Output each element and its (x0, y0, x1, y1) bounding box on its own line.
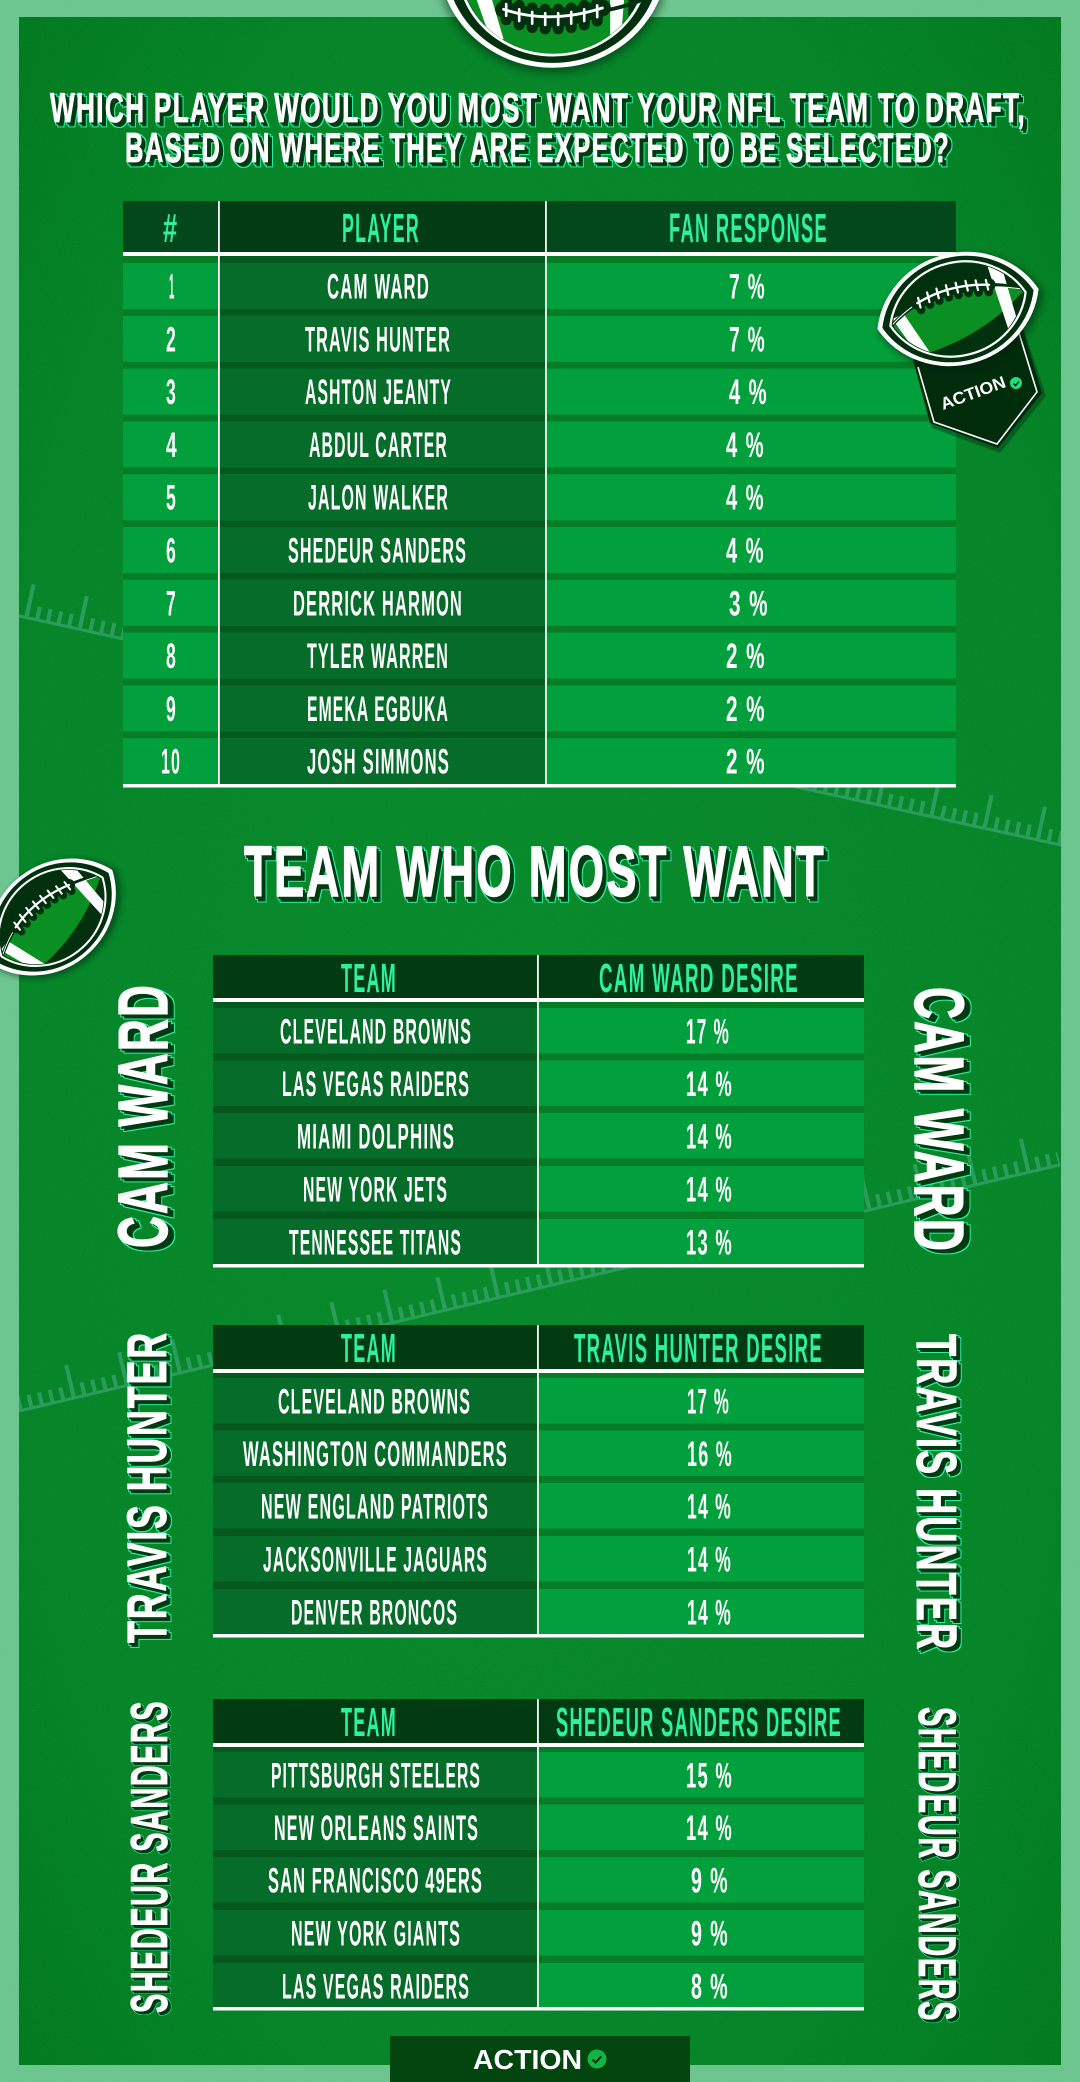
header labels: TEAM (341, 1325, 397, 1371)
row: 10 Josh Simmons: 2 % (726, 743, 766, 782)
football (856, 229, 1060, 390)
row: 7 Derrick Harmon: DERRICK HARMON (293, 584, 463, 623)
row: New York Giants: NEW YORK GIANTS (291, 1914, 461, 1954)
row: New Orleans Saints: 14 % (686, 1809, 733, 1848)
icon: left football (0, 823, 152, 1012)
row: 1 Cam Ward: 7 % (729, 268, 766, 306)
row: Washington Commanders: WASHINGTON COMMANDERS (243, 1435, 508, 1474)
header labels (341, 1699, 842, 1745)
row: 4 Abdul Carter: ABDUL CARTER (309, 426, 448, 465)
row: 4 Abdul Carter (166, 426, 765, 465)
side label left: Shedeur Sanders: SHEDEUR SANDERS (121, 1700, 179, 2013)
table header labels: PLAYER (342, 205, 420, 251)
row: 10 Josh Simmons (161, 743, 766, 782)
title (50, 84, 1026, 171)
row: 8 Tyler Warren: TYLER WARREN (307, 637, 449, 676)
row: 4 Abdul Carter: 4 % (726, 426, 765, 465)
row: 10 Josh Simmons: 10 (161, 743, 181, 782)
row: 3 Ashton Jeanty: ASHTON JEANTY (305, 373, 452, 412)
icon: top football (436, 0, 680, 73)
row: 6 Shedeur Sanders: 6 (166, 532, 177, 570)
table background (213, 1325, 864, 1634)
row: 9 Emeka Egbuka (166, 690, 766, 729)
row: 1 Cam Ward (169, 268, 766, 306)
row: 9 Emeka Egbuka: 2 % (726, 690, 766, 729)
panel: fan response table (123, 201, 956, 788)
row: 9 Emeka Egbuka: 9 (166, 690, 177, 729)
row: Denver Broncos: DENVER BRONCOS (291, 1594, 458, 1632)
panel: fan response table: FAN RESPONSE (669, 205, 828, 251)
icon: football with Action pennant (856, 229, 1060, 453)
panel: Cam Ward desire table: CAM WARD DESIRE (599, 955, 799, 1001)
panel: Cam Ward desire table: 17 % (686, 1012, 730, 1052)
side label left: Cam Ward: CAM WARD (104, 983, 182, 1248)
footer: Action logo (390, 2036, 690, 2082)
row: 5 Jalon Walker: 4 % (726, 479, 765, 518)
row: Jacksonville Jaguars: JACKSONVILLE JAGUARS (263, 1540, 488, 1580)
row: 7 Derrick Harmon: 3 % (729, 584, 769, 623)
row: New Orleans Saints: NEW ORLEANS SAINTS (274, 1809, 479, 1848)
row: New York Giants: 9 % (691, 1914, 729, 1954)
row: 3 Ashton Jeanty (166, 373, 768, 412)
row: New England Patriots: NEW ENGLAND PATRIOTS (261, 1488, 489, 1526)
row: 8 Tyler Warren: 2 % (726, 637, 766, 676)
row: 6 Shedeur Sanders: SHEDEUR SANDERS (288, 532, 467, 570)
row: 7 Derrick Harmon (166, 584, 769, 623)
row: 6 Shedeur Sanders: 4 % (726, 532, 765, 570)
table background (213, 1699, 864, 2007)
table body stripes (123, 256, 956, 784)
row: 8 Tyler Warren: 8 (166, 637, 177, 676)
side label left: Travis Hunter: TRAVIS HUNTER (115, 1331, 178, 1643)
table header labels: # (163, 205, 179, 251)
table header backgrounds (123, 201, 956, 252)
row: 9 Emeka Egbuka: EMEKA EGBUKA (307, 690, 449, 729)
row: Washington Commanders: 16 % (687, 1435, 733, 1474)
row: Pittsburgh Steelers: PITTSBURGH STEELERS (271, 1756, 481, 1796)
row: 2 Travis Hunter (166, 320, 766, 359)
row: Denver Broncos: 14 % (687, 1594, 732, 1632)
table background (213, 955, 864, 1264)
panel: Shedeur Sanders desire table (213, 1699, 864, 2010)
row: San Francisco 49ers: 9 % (691, 1862, 729, 1900)
row: 2 Travis Hunter: 7 % (729, 320, 766, 359)
row: 4 Abdul Carter: 4 (166, 426, 178, 465)
table header labels (163, 205, 828, 251)
yard line: ascending behind team tables (15, 1148, 1060, 1411)
row: Cleveland Browns: CLEVELAND BROWNS (278, 1382, 471, 1422)
footer: Action logo: ACTION (473, 2044, 582, 2075)
side label right: Travis Hunter: TRAVIS HUNTER (904, 1334, 968, 1651)
row: 5 Jalon Walker: JALON WALKER (308, 479, 449, 518)
row: New England Patriots: 14 % (687, 1488, 732, 1526)
row: Cleveland Browns: CLEVELAND BROWNS (280, 1012, 472, 1052)
row: San Francisco 49ers: SAN FRANCISCO 49ERS (268, 1862, 483, 1900)
row: Miami Dolphins: 14 % (686, 1118, 733, 1156)
row: Tennessee Titans: 13 % (686, 1224, 733, 1262)
row: Miami Dolphins: MIAMI DOLPHINS (297, 1118, 455, 1156)
row: Tennessee Titans: TENNESSEE TITANS (289, 1224, 462, 1262)
row: Las Vegas Raiders: LAS VEGAS RAIDERS (282, 1968, 470, 2006)
row: Las Vegas Raiders: 8 % (691, 1968, 729, 2006)
panel: Travis Hunter desire table (213, 1325, 864, 1638)
row: 1 Cam Ward: CAM WARD (327, 268, 430, 306)
row: 10 Josh Simmons: JOSH SIMMONS (307, 743, 450, 782)
yard line: descending behind first table (19, 599, 1066, 845)
row: Las Vegas Raiders: LAS VEGAS RAIDERS (282, 1065, 470, 1104)
header labels: TEAM (341, 1699, 397, 1745)
row: 2 Travis Hunter: 2 (166, 320, 177, 359)
header labels: TEAM (341, 955, 397, 1001)
row: New York Jets: NEW YORK JETS (303, 1170, 448, 1210)
row: 5 Jalon Walker (166, 479, 765, 518)
header labels (341, 955, 799, 1001)
row: 3 Ashton Jeanty: 4 % (729, 373, 768, 412)
row: 8 Tyler Warren (166, 637, 766, 676)
pennant: ACTION (938, 373, 1008, 414)
header labels (341, 1325, 823, 1371)
row: 3 Ashton Jeanty: 3 (166, 373, 177, 412)
row: Jacksonville Jaguars: 14 % (687, 1540, 732, 1580)
panel: Cam Ward desire table (213, 955, 864, 1268)
row: 1 Cam Ward: 1 (169, 268, 175, 306)
pennant (913, 327, 1046, 453)
side label right: Cam Ward: CAM WARD (900, 987, 978, 1253)
panel: Travis Hunter desire table: 17 % (687, 1382, 730, 1422)
row: 2 Travis Hunter: TRAVIS HUNTER (305, 320, 451, 359)
row: 7 Derrick Harmon: 7 (166, 584, 177, 623)
row: Las Vegas Raiders: 14 % (686, 1065, 733, 1104)
row: Pittsburgh Steelers: 15 % (686, 1756, 733, 1796)
row: 6 Shedeur Sanders (166, 532, 765, 570)
row: 5 Jalon Walker: 5 (166, 479, 177, 518)
row: New York Jets: 14 % (686, 1170, 733, 1210)
